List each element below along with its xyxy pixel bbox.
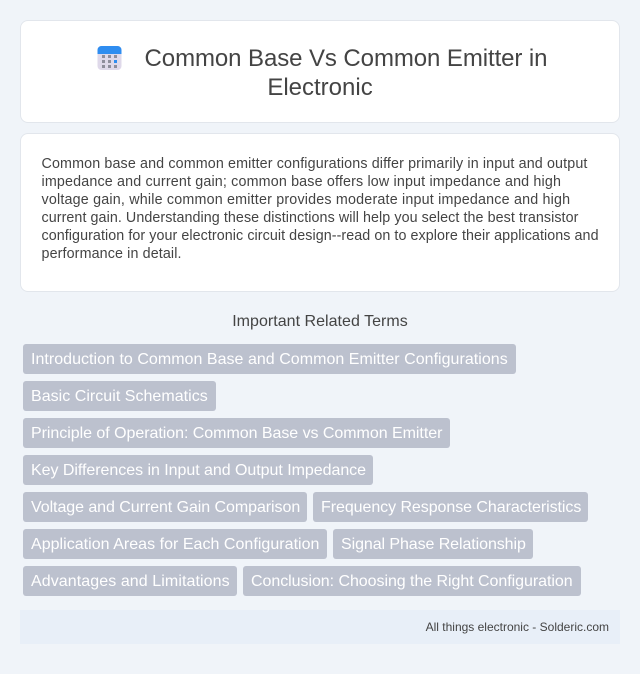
tag: introduction: Introduction to Common Base and Common Emitter Configurations (31, 351, 508, 368)
tag: phase: Signal Phase Relationship (341, 536, 526, 553)
intro paragraph (42, 156, 599, 262)
panel: title card (20, 20, 620, 123)
intro paragraph: configuration for your electronic circuit design--read on to explore their applications and (42, 228, 599, 244)
title: Common Base Vs Common Emitter in (145, 45, 547, 72)
tag: advantages (23, 566, 237, 596)
tag: principle: Principle of Operation: Common Base vs Common Emitter (31, 425, 442, 442)
tag: principle (23, 418, 450, 448)
tag: introduction (23, 344, 516, 374)
panel: intro text (20, 133, 620, 292)
intro paragraph: current gain. Understanding these distinctions will help you select the best transistor (42, 210, 578, 226)
tag: impedance (23, 455, 373, 485)
tag: frequency: Frequency Response Characteristics (321, 499, 581, 516)
tag: schematics: Basic Circuit Schematics (31, 388, 208, 405)
intro paragraph: performance in detail. (42, 246, 182, 262)
tag: schematics (23, 381, 216, 411)
tag: gain (23, 492, 307, 522)
title (145, 45, 547, 101)
footer credit: All things electronic - Solderic.com (426, 620, 609, 634)
tag: conclusion (243, 566, 581, 596)
intro paragraph: impedance and current gain; common base offers low input impedance and high (42, 174, 561, 190)
intro paragraph: voltage gain, while common emitter provides moderate input impedance and high (42, 192, 570, 208)
tag: conclusion: Conclusion: Choosing the Right Configuration (251, 573, 573, 590)
footer (20, 610, 620, 644)
intro paragraph: Common base and common emitter configurations differ primarily in input and output (42, 156, 588, 172)
icon: calendar (98, 46, 122, 70)
tag: impedance: Key Differences in Input and Output Impedance (31, 462, 366, 479)
tag: application: Application Areas for Each Configuration (31, 536, 319, 553)
tag: frequency (313, 492, 588, 522)
tag: phase (333, 529, 533, 559)
tag: gain: Voltage and Current Gain Comparison (31, 499, 300, 516)
heading: related terms: Important Related Terms (232, 313, 408, 330)
title: Electronic (267, 74, 373, 101)
tag: application (23, 529, 327, 559)
tag: advantages: Advantages and Limitations (31, 573, 230, 590)
